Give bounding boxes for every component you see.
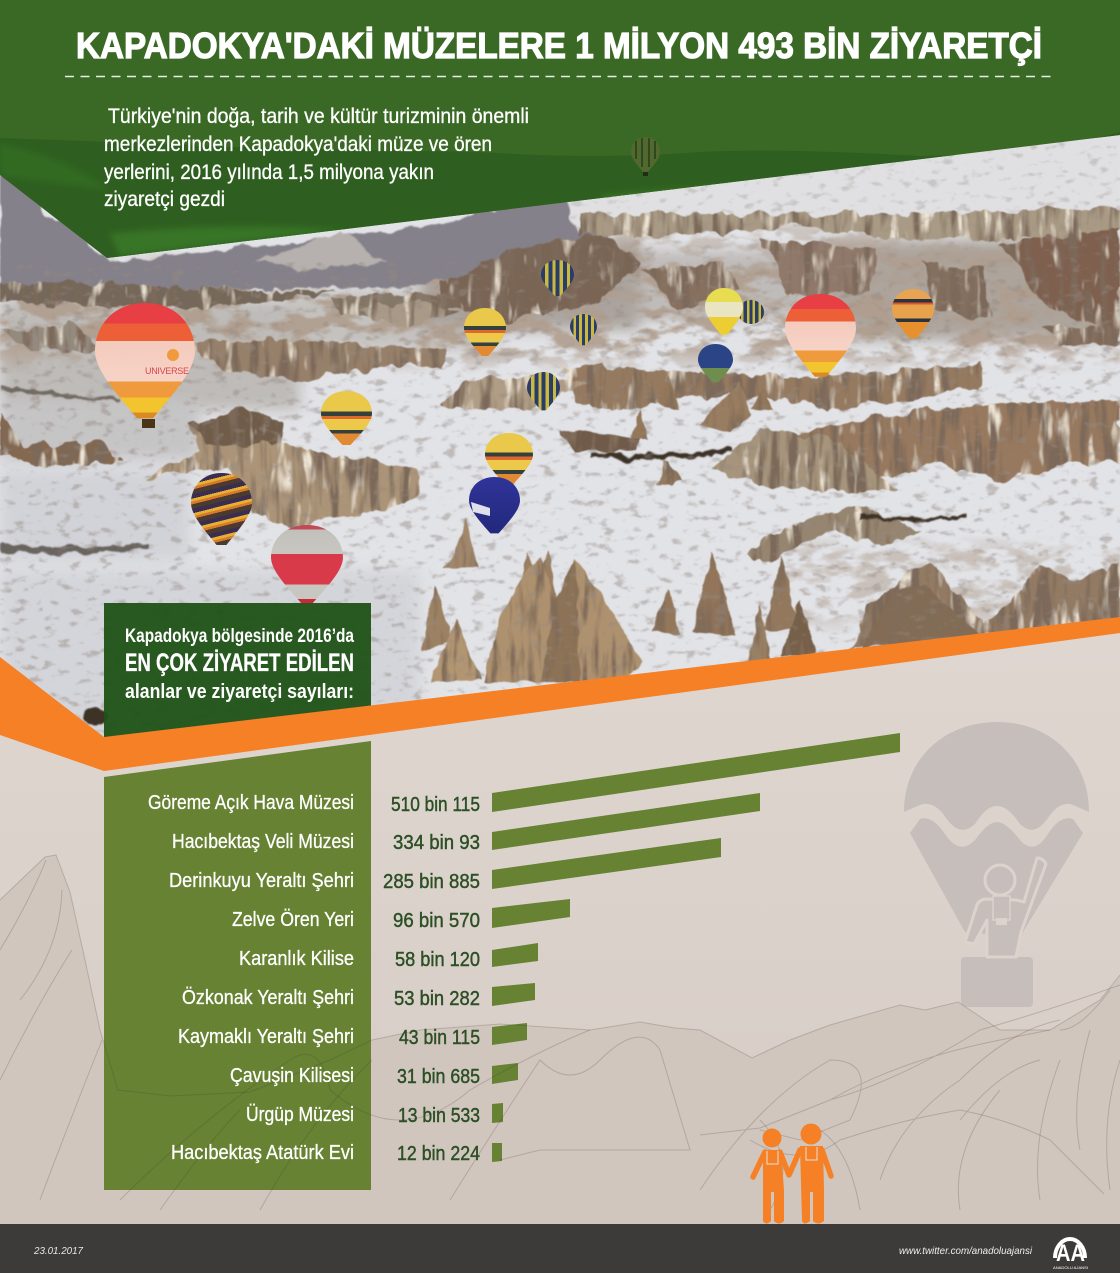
labels: site names: Kaymaklı Yeraltı Şehri	[178, 1026, 354, 1048]
balloon: yellow striped	[321, 391, 372, 445]
panel: chart heading	[104, 603, 371, 739]
intro text: ziyaretçi gezdi	[104, 188, 225, 211]
balloon: yellow striped small	[464, 308, 506, 356]
values: visitor numbers: 31 bin 685	[397, 1065, 480, 1088]
title: KAPADOKYA'DAKİ MÜZELERE 1 MİLYON 493 BİN ZİYARETÇİ	[76, 25, 1042, 66]
balloon: large Universe balloon: UNIVERSE	[145, 366, 189, 376]
balloon: navy yellow center	[527, 372, 560, 410]
balloon: yellow white	[705, 288, 743, 335]
footer bar	[0, 1224, 1120, 1273]
panel: site names	[104, 741, 371, 1190]
intro text	[104, 105, 529, 211]
green title banner	[0, 0, 1120, 270]
intro text: merkezlerinden Kapadokya'daki müze ve ören	[104, 133, 492, 156]
balloon: multicolor stripes	[191, 473, 252, 545]
mountains: fill	[0, 855, 1120, 1224]
values: visitor numbers: 43 bin 115	[399, 1026, 480, 1049]
balloon: large Universe balloon	[95, 303, 195, 428]
values: visitor numbers: 12 bin 224	[397, 1142, 480, 1165]
panel: chart heading: EN ÇOK ZİYARET EDİLEN	[125, 649, 354, 677]
balloon: blue green	[698, 344, 733, 382]
values: visitor numbers	[383, 793, 480, 1165]
beige background	[0, 630, 1120, 1230]
balloon: faded green balloon in banner	[631, 137, 660, 176]
balloon: orange striped	[892, 289, 934, 338]
values: visitor numbers: 96 bin 570	[393, 909, 480, 932]
values: visitor numbers: 53 bin 282	[394, 987, 480, 1010]
labels: site names: Hacıbektaş Veli Müzesi	[172, 831, 354, 853]
balloon: navy yellow top	[541, 260, 574, 296]
icon: grey balloon with tourist	[904, 722, 1089, 1007]
icon: Anadolu Agency logo: AA	[1056, 1240, 1085, 1267]
labels: site names: Özkonak Yeraltı Şehri	[182, 987, 354, 1009]
labels: site names: Karanlık Kilise	[239, 948, 354, 970]
values: visitor numbers: 510 bin 115	[391, 793, 480, 816]
footer bar: 23.01.2017	[33, 1246, 83, 1257]
labels: site names: Göreme Açık Hava Müzesi	[148, 792, 354, 814]
photo: snowy Cappadocia valley	[0, 120, 1120, 780]
balloon: blue	[469, 477, 520, 533]
balloon: yellow striped center	[485, 433, 533, 485]
mountains: contour lines	[0, 855, 1120, 1210]
balloon: navy yellow small	[570, 314, 597, 345]
intro text: Türkiye'nin doğa, tarih ve kültür turizminin önemli	[108, 105, 529, 128]
balloon: navy behind yellow	[738, 300, 764, 324]
labels: site names: Ürgüp Müzesi	[246, 1104, 354, 1126]
icon: Anadolu Agency logo: ANADOLU AJANSI	[1053, 1265, 1088, 1270]
intro text: yerlerini, 2016 yılında 1,5 milyona yakın	[104, 161, 434, 184]
panel: chart heading: Kapadokya bölgesinde 2016’da	[125, 626, 354, 647]
values: visitor numbers: 285 bin 885	[383, 870, 480, 893]
footer bar: www.twitter.com/anadoluajansi	[899, 1245, 1033, 1257]
values: visitor numbers: 334 bin 93	[393, 831, 480, 854]
bar chart	[492, 733, 900, 1162]
labels: site names: Zelve Ören Yeri	[232, 909, 354, 931]
balloon: large red balloon right	[785, 294, 856, 377]
values: visitor numbers: 13 bin 533	[398, 1104, 480, 1127]
labels: site names: Çavuşin Kilisesi	[230, 1065, 354, 1087]
labels: site names: Hacıbektaş Atatürk Evi	[171, 1142, 354, 1164]
panel: chart heading: alanlar ve ziyaretçi sayıları:	[125, 681, 354, 703]
balloon: red and white	[271, 525, 343, 603]
orange diagonal band	[0, 617, 1120, 771]
icon: two orange tourists holding hands	[753, 1124, 831, 1224]
labels: site names	[148, 792, 354, 1164]
labels: site names: Derinkuyu Yeraltı Şehri	[169, 870, 354, 892]
values: visitor numbers: 58 bin 120	[395, 948, 480, 971]
